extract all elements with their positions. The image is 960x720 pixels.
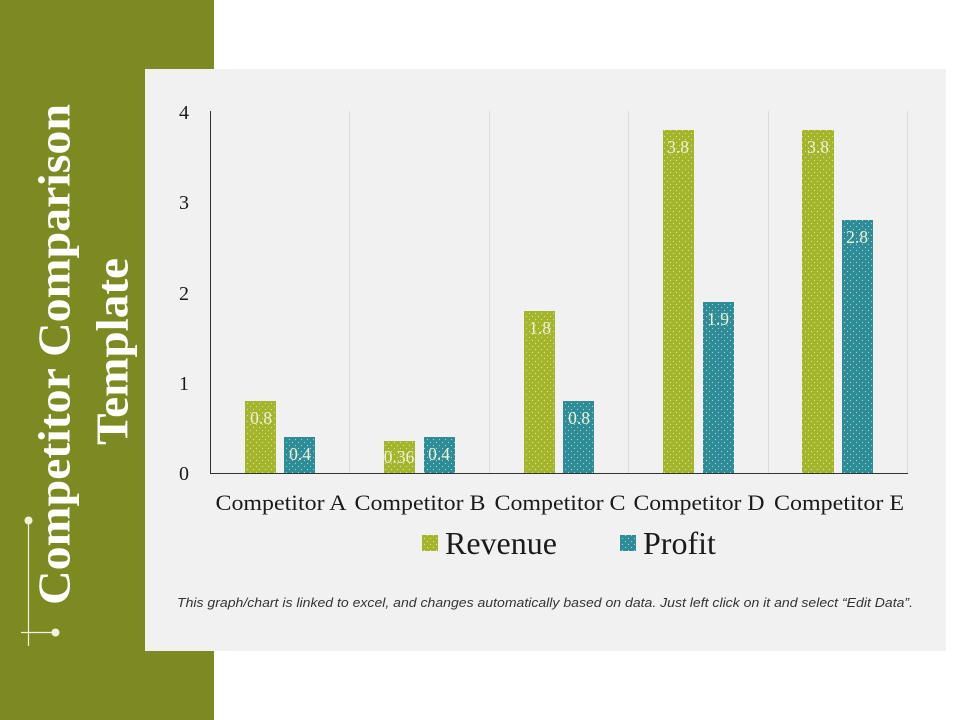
y axis labels: 2 <box>179 283 189 305</box>
y axis labels: 1 <box>179 373 189 395</box>
footnote: This graph/chart is linked to excel, and changes automatically based on data. Just left click on it and select “Edit Data”. <box>177 596 913 610</box>
legend <box>422 525 716 561</box>
data labels: 3.8 <box>807 137 829 157</box>
data labels: 0.4 <box>428 444 450 464</box>
y axis labels <box>179 102 189 485</box>
category labels: Competitor D <box>634 490 764 515</box>
revenue bars <box>245 130 834 473</box>
data labels: 0.8 <box>568 408 590 428</box>
category labels: Competitor C <box>494 490 626 515</box>
y axis labels: 4 <box>179 102 189 124</box>
title <box>30 104 138 605</box>
chart panel <box>145 69 946 651</box>
title: Competitor Comparison <box>30 104 80 605</box>
data labels: 0.8 <box>250 408 272 428</box>
data labels: 2.8 <box>846 227 868 247</box>
bar chart <box>179 102 908 515</box>
legend: Profit <box>643 525 716 561</box>
y axis labels: 0 <box>179 463 189 485</box>
axes <box>210 111 908 474</box>
data labels: 1.8 <box>529 318 551 338</box>
category labels: Competitor A <box>216 490 347 515</box>
data labels: 0.4 <box>289 444 311 464</box>
y axis labels: 3 <box>179 192 189 214</box>
category labels <box>216 490 904 515</box>
profit bars <box>284 220 873 473</box>
category labels: Competitor B <box>354 490 486 515</box>
data labels: 3.8 <box>667 137 689 157</box>
data labels <box>250 137 868 467</box>
gridlines <box>350 111 908 473</box>
title: Template <box>88 258 138 445</box>
data labels: 0.36 <box>384 447 415 467</box>
decorative line icon <box>21 516 60 646</box>
legend: Revenue <box>445 525 557 561</box>
category labels: Competitor E <box>774 490 904 515</box>
sidebar panel <box>0 0 214 720</box>
data labels: 1.9 <box>707 309 729 329</box>
